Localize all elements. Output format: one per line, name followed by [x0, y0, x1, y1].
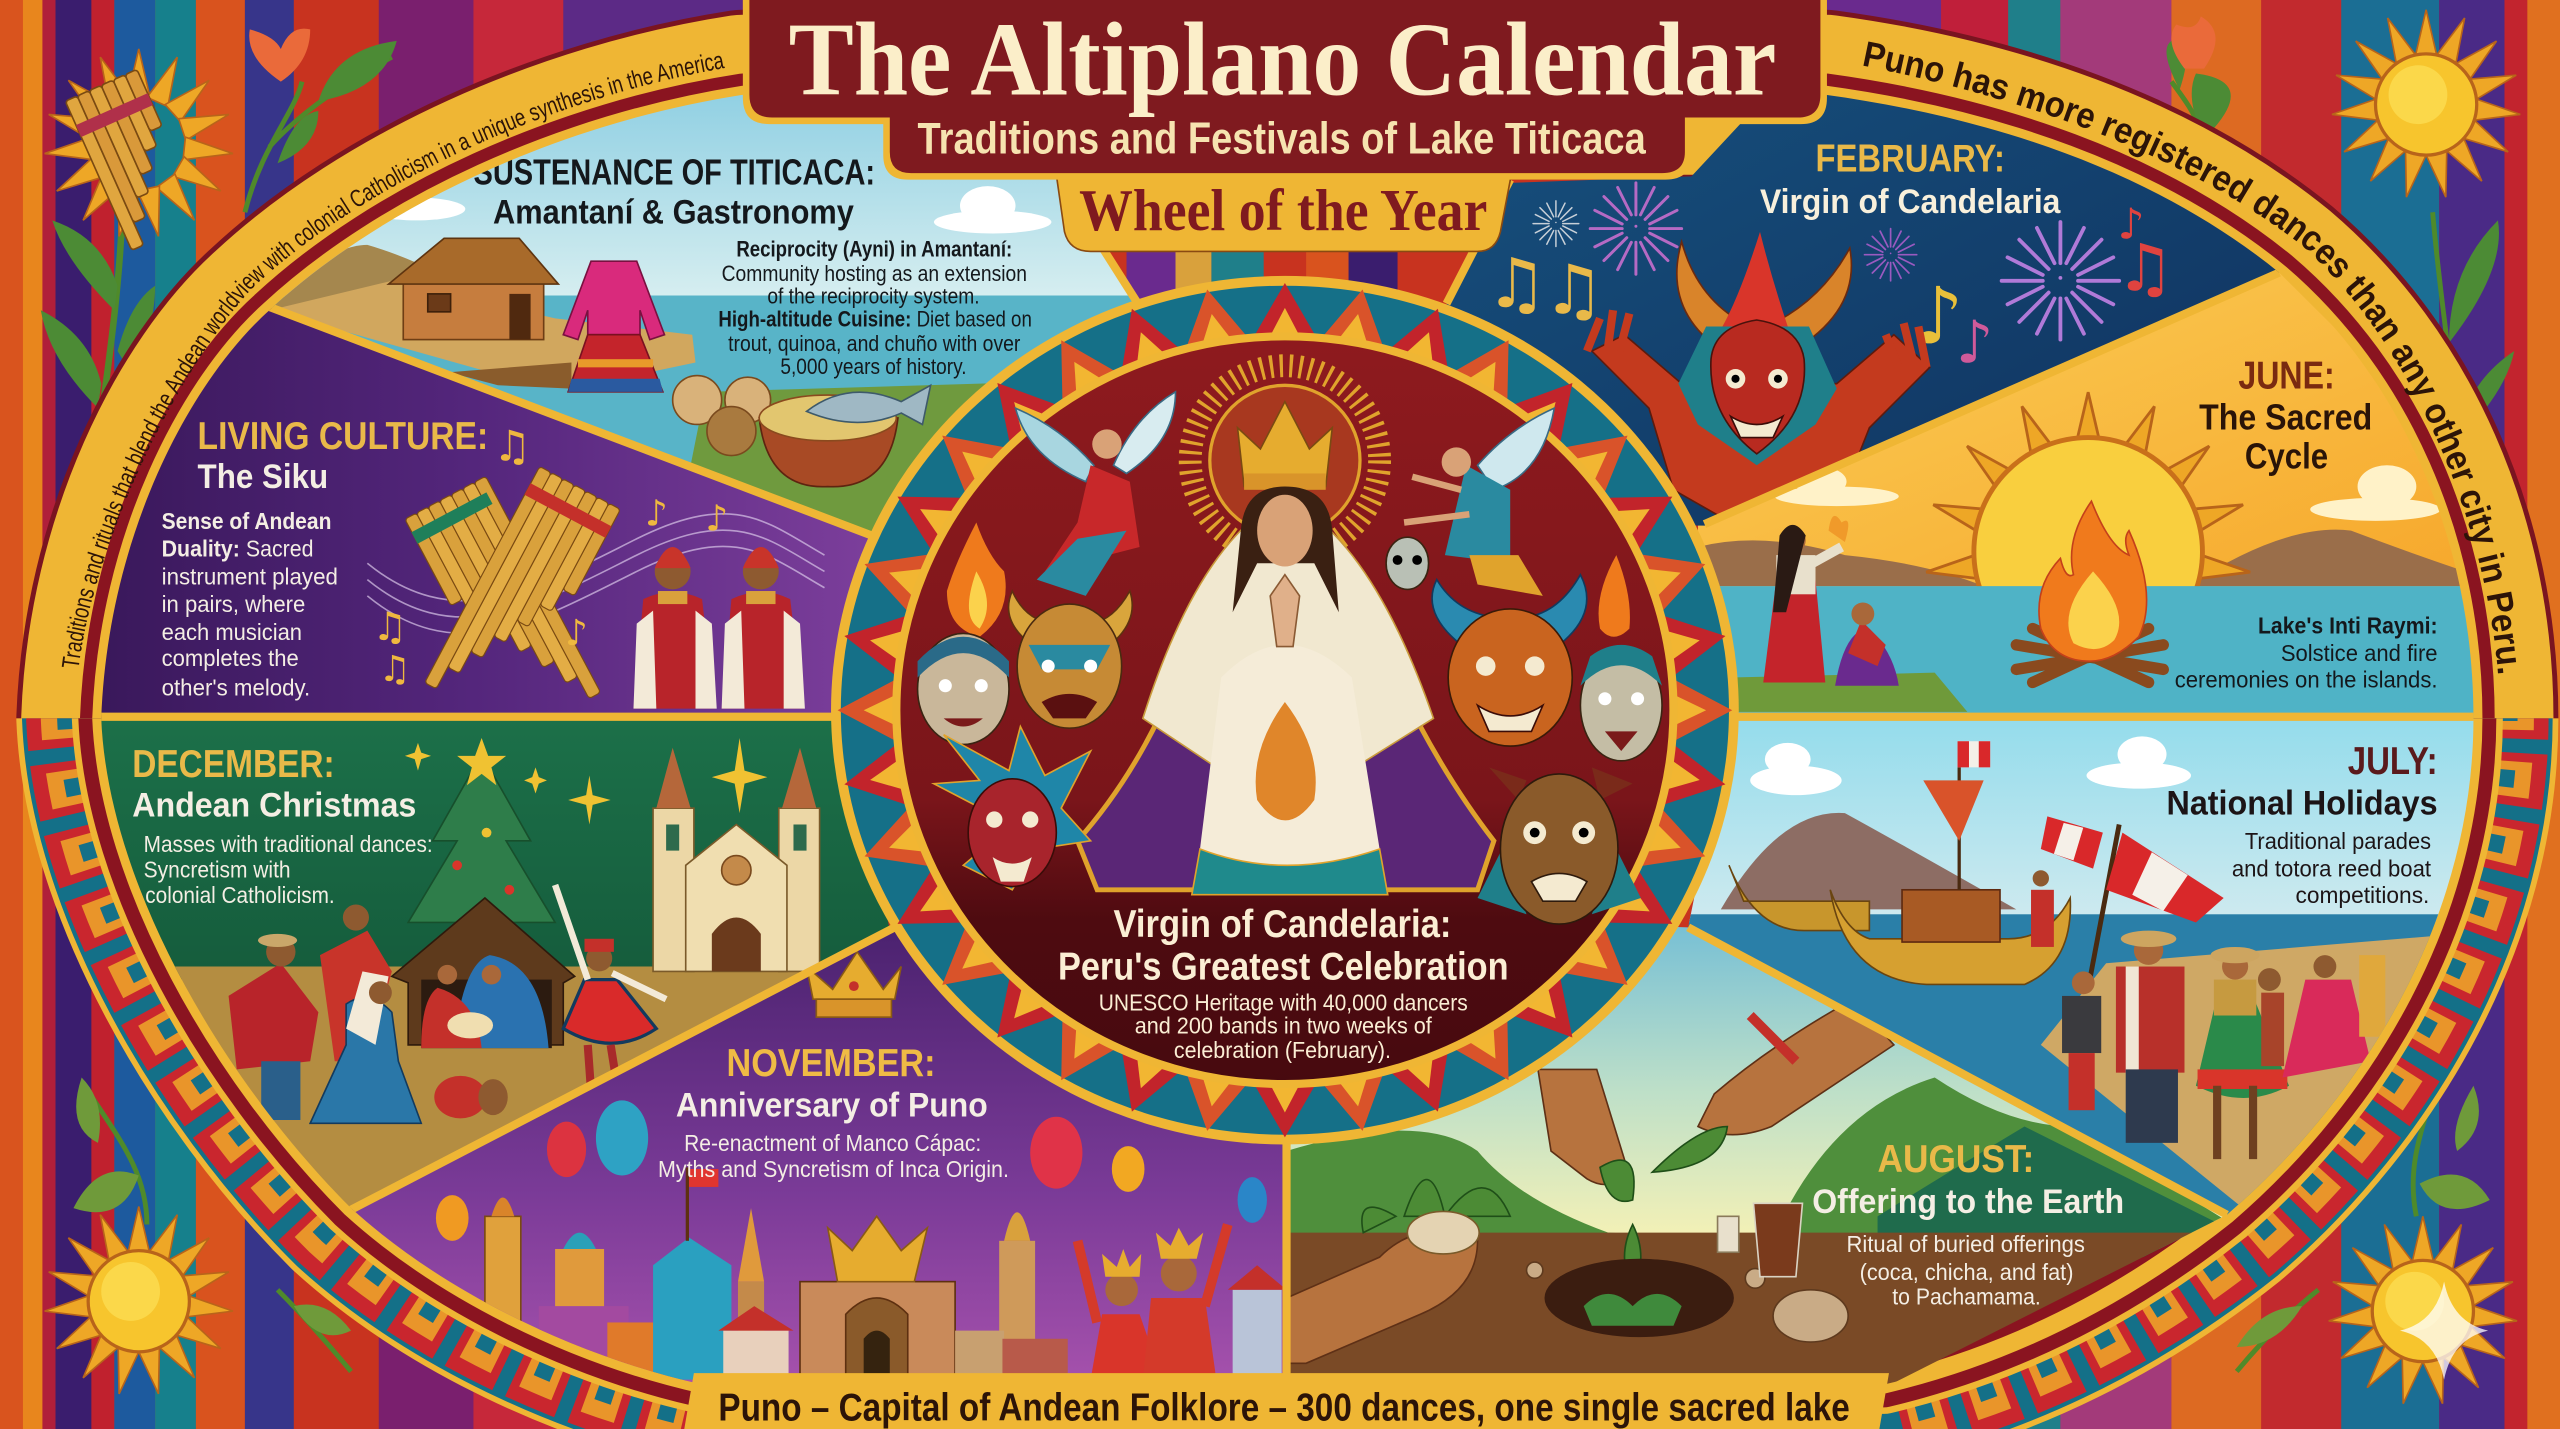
panel: August, Offering to the Earth	[1287, 906, 2286, 1388]
mountain	[1721, 813, 2016, 909]
text: July heading and body: and totora reed boat	[2232, 856, 2432, 882]
sand beach	[2041, 931, 2498, 1241]
text: Sustenance heading and body: Reciprocity (Ayni) in Amantaní:	[736, 236, 1012, 261]
text: subtitle: Traditions and Festivals of Lake Titicaca	[918, 114, 1646, 163]
icon: music notes and clefs: ♪	[2118, 200, 2145, 249]
icon: music notes: ♪	[645, 494, 668, 535]
text: July heading and body	[2167, 740, 2438, 908]
icon: Christmas tree	[408, 738, 555, 922]
text: Living Culture heading and body: in pairs, where	[162, 591, 305, 617]
text: Living Culture heading and body: other's melody.	[162, 675, 310, 701]
text: November heading and body	[658, 1042, 1009, 1182]
text: June heading and body: Lake's Inti Raymi:	[2258, 612, 2438, 638]
icon: balloons	[436, 1100, 1267, 1241]
text: August heading and body: (coca, chicha, and fat)	[1860, 1259, 2073, 1285]
hillside and island	[272, 244, 986, 531]
gold spokes between panels	[98, 180, 2482, 1380]
icon: potatoes	[673, 376, 771, 456]
text: December heading and body: colonial Catholicism.	[145, 882, 335, 908]
lake water	[1698, 586, 2514, 725]
icon: panpipe on sunburst with stem, top left	[41, 49, 234, 490]
text: June heading and body	[2175, 355, 2438, 692]
text: November heading and body: NOVEMBER:	[727, 1042, 936, 1085]
icon: orange devil mask	[1432, 575, 1587, 746]
text: Living Culture heading and body: each musician	[162, 619, 302, 645]
icon: fireworks	[1533, 183, 2119, 340]
text: main title: The Altiplano Calendar	[789, 2, 1776, 118]
triangular woven border	[838, 283, 1732, 1137]
icon: horned tan mask	[1009, 591, 1132, 728]
icon: sun and plant, bottom left	[43, 1078, 351, 1396]
heading: Wheel of the Year plate	[1055, 163, 1513, 251]
panel: July, National Holidays	[1682, 718, 2498, 1241]
text: June heading and body: Cycle	[2245, 436, 2328, 477]
ring text right: Puno has more registered dances than any other city in Peru.	[1863, 42, 2516, 674]
text: February heading: Virgin of Candelaria	[1760, 183, 2061, 221]
icon: grey mask with headband	[918, 633, 1009, 744]
icon: sun and plant, top right	[2166, 10, 2521, 490]
text: Living Culture heading and body: The Siku	[198, 458, 328, 496]
mountains	[1698, 530, 2465, 586]
icon: crowned dancers	[1078, 1224, 1228, 1380]
icon: rock and stones	[1527, 1262, 1848, 1342]
icon: music notes: ♫	[379, 649, 411, 690]
icon: music notes: ♪	[705, 499, 728, 540]
icon: Peruvian flags	[2041, 816, 2224, 980]
text: June heading and body: The Sacred	[2199, 396, 2372, 437]
icon: coca leaves	[1362, 1127, 1727, 1290]
text: Virgin of Candelaria caption: UNESCO Heritage with 40,000 dancers	[1099, 990, 1468, 1016]
text: Virgin of Candelaria caption: celebration (February).	[1174, 1037, 1391, 1063]
icon: offering pile in hands	[1407, 1211, 1479, 1254]
icon: parading family in costume	[2062, 931, 2385, 1159]
text: December heading and body	[132, 743, 433, 908]
text: November heading and body: Myths and Syncretism of Inca Origin.	[658, 1156, 1009, 1182]
icon: music notes and clefs	[1486, 200, 2174, 376]
icon: sound waves	[367, 514, 824, 633]
text: December heading and body: DECEMBER:	[132, 743, 335, 786]
icon: clouds	[1775, 465, 2441, 521]
icon: clouds	[1750, 736, 2191, 795]
island	[1731, 673, 1967, 712]
text: August heading and body: Ritual of buried offerings	[1847, 1231, 2085, 1257]
icon: brown devil mask	[1478, 767, 1641, 924]
text: July heading and body: competitions.	[2296, 882, 2429, 908]
icon: music notes and clefs: ♪	[1956, 307, 1993, 376]
central medallion	[831, 276, 1739, 1144]
text: June heading and body: Solstice and fire	[2281, 640, 2438, 666]
outer ring lower half: zigzag woven band	[16, 718, 2558, 1429]
icon: two siku musicians	[633, 547, 805, 709]
icon: music notes: ♫	[493, 422, 531, 471]
panel: Living Culture, The Siku	[101, 308, 868, 718]
title plate	[743, 0, 1827, 180]
panel: December, Andean Christmas	[65, 718, 914, 1216]
text: November heading and body: Re-enactment of Manco Cápac:	[684, 1130, 981, 1156]
icon: music notes	[372, 422, 728, 690]
icon: red feathered mask	[934, 727, 1091, 890]
text: August heading and body	[1812, 1138, 2124, 1309]
icon: traditional dress	[563, 261, 664, 392]
icon: Virgin of Candelaria figure	[1078, 487, 1494, 895]
text: December heading and body: Andean Christmas	[132, 786, 416, 824]
text: Living Culture heading and body	[162, 415, 488, 701]
text: December heading and body: Syncretism with	[144, 857, 291, 883]
text: Virgin of Candelaria caption	[1058, 903, 1509, 1063]
text: Sustenance heading and body: Amantaní & Gastronomy	[493, 194, 854, 232]
text: June heading and body: JUNE:	[2238, 355, 2335, 398]
icon: left angel	[1016, 392, 1176, 596]
icon: ritual pit	[1544, 1259, 1734, 1337]
icon: grey bearded mask	[1580, 645, 1662, 761]
icon: flames	[947, 522, 1630, 637]
outer ring upper half: gold text band	[16, 10, 2558, 718]
icon: diablada devil mask dancer	[1587, 232, 1930, 522]
bottom banner	[684, 1373, 1889, 1429]
icon: music notes and clefs: ♪	[1913, 271, 1963, 362]
text: February heading	[1760, 137, 2061, 221]
textile showing through above medallion	[1045, 163, 1535, 310]
icon: hands placing coca leaves	[1287, 999, 1894, 1363]
icon: totora reed boats	[1729, 741, 2070, 984]
text: Sustenance heading and body: SUSTENANCE OF TITICACA:	[473, 151, 875, 192]
icon: crossed panpipes	[406, 467, 620, 698]
green mountains and soil	[1287, 1078, 2286, 1388]
text: February heading: FEBRUARY:	[1816, 137, 2005, 180]
text: Living Culture heading and body: completes the	[162, 645, 299, 671]
text: Sustenance heading and body: of the reciprocity system.	[767, 284, 980, 309]
text: Sustenance heading and body: 5,000 years of history.	[780, 354, 967, 379]
icon: music notes: ♪	[565, 613, 588, 654]
text: June heading and body: ceremonies on the islands.	[2175, 666, 2438, 692]
panel: Sustenance of Titicaca	[272, 94, 1132, 531]
icon: music notes: ♫	[372, 605, 407, 650]
icon: cup of chicha	[1718, 1203, 1802, 1277]
icon: right angel	[1404, 408, 1554, 596]
text: August heading and body: to Pachamama.	[1892, 1283, 2041, 1309]
text: Living Culture heading and body: Sense of Andean	[162, 508, 331, 534]
text: Virgin of Candelaria caption: and 200 bands in two weeks of	[1135, 1012, 1432, 1038]
icon: adobe hut	[389, 238, 558, 340]
text: Sustenance heading and body	[473, 151, 1032, 379]
text: December heading and body: Masses with traditional dances:	[144, 831, 433, 857]
text: November heading and body: Anniversary of Puno	[676, 1087, 988, 1125]
text: Virgin of Candelaria caption: Virgin of Candelaria:	[1113, 903, 1451, 946]
text: August heading and body: AUGUST:	[1878, 1138, 2034, 1181]
icon: golden halo and crown	[1190, 366, 1380, 555]
icon: music notes and clefs: ♫	[2116, 231, 2174, 307]
icon: gold crown	[807, 952, 901, 1017]
icon: bowl of quinoa and fish	[759, 385, 931, 487]
icon: music notes and clefs: ♫	[1486, 244, 1547, 324]
icon: stars	[405, 738, 767, 824]
text: Virgin of Candelaria caption: Peru's Greatest Celebration	[1058, 946, 1509, 989]
text: July heading and body: National Holidays	[2167, 785, 2438, 823]
text: Living Culture heading and body: Duality: Sacred	[162, 536, 313, 562]
text: Sustenance heading and body: trout, quinoa, and chuño with over	[728, 331, 1020, 356]
heading: Wheel of the Year plate: Wheel of the Year	[1079, 178, 1487, 243]
panel: June, The Sacred Cycle	[1698, 261, 2514, 725]
icon: rising sun	[1924, 392, 2252, 719]
bottom banner: Puno – Capital of Andean Folklore – 300 dances, one single sacred lake	[718, 1386, 1850, 1429]
icon: sun, plant and sparkle, bottom right	[2237, 1086, 2518, 1406]
icon: villagers and dancer	[229, 885, 666, 1123]
icon: clouds	[393, 186, 1052, 234]
text: July heading and body: JULY:	[2348, 740, 2438, 783]
icon: two women offering to the fire	[1763, 516, 1899, 686]
icon: Puno city skyline	[485, 1167, 1287, 1380]
text: August heading and body: Offering to the Earth	[1812, 1183, 2124, 1221]
icon: flower and leaves, top left	[245, 29, 397, 212]
text: Living Culture heading and body: LIVING CULTURE:	[198, 415, 488, 458]
text: Sustenance heading and body: Community hosting as an extension	[722, 261, 1027, 286]
icon: bonfire	[2016, 501, 2163, 682]
text: Living Culture heading and body: instrument played	[162, 563, 338, 589]
icon: colonial church	[653, 748, 820, 971]
icon: small silver mask	[1386, 537, 1429, 589]
text: July heading and body: Traditional parades	[2245, 828, 2431, 854]
text: Sustenance heading and body: High-altitude Cuisine: Diet based on	[718, 307, 1032, 332]
panel: February, Virgin of Candelaria	[1437, 33, 2351, 539]
icon: nativity stable	[392, 898, 575, 1048]
panel: November, Anniversary of Puno	[310, 906, 1290, 1389]
icon: music notes and clefs: ♫	[1543, 250, 1604, 330]
